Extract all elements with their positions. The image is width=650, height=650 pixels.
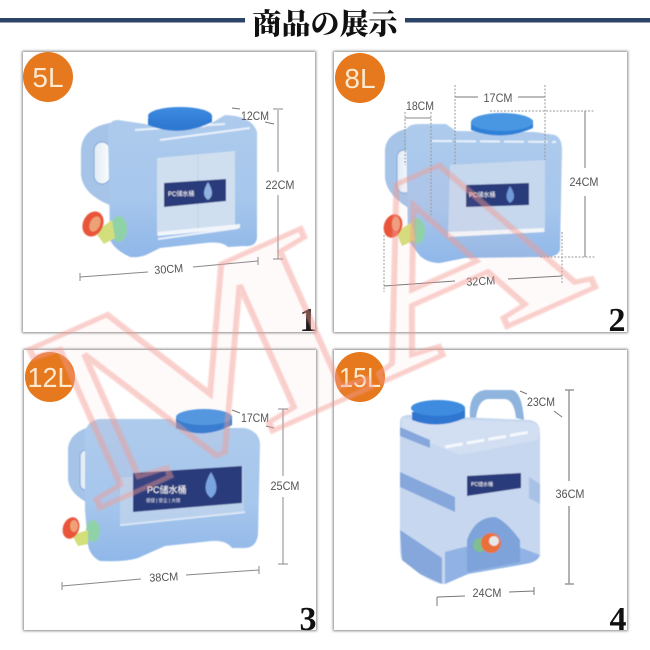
dimension: 12CM xyxy=(232,108,274,124)
dimension: 17CM: 17CM xyxy=(241,413,269,425)
dimension: 24CM: 24CM xyxy=(472,588,502,600)
badge: 15L xyxy=(335,352,385,402)
dimension: 30CM xyxy=(80,257,258,281)
dimension: 25CM xyxy=(270,409,300,564)
badge: 5L xyxy=(23,52,73,102)
jug: 12L: PC储水桶 xyxy=(147,484,187,495)
label xyxy=(466,183,529,207)
jug: 8L xyxy=(380,113,562,263)
number 1: 1 xyxy=(300,302,316,339)
panel: 12L xyxy=(23,349,317,638)
badge: 12L: 12L xyxy=(28,362,72,393)
jug: 5L xyxy=(78,107,257,257)
jug: 15L xyxy=(400,390,540,584)
dimension: 36CM xyxy=(556,390,584,584)
jug: 12L xyxy=(60,409,260,561)
dimension: 36CM: 36CM xyxy=(556,489,584,501)
dimension: 30CM: 30CM xyxy=(154,263,184,277)
number 2: 2 xyxy=(608,302,626,339)
dimension: 24CM xyxy=(490,111,598,257)
jug: 5L: PC储水桶 xyxy=(168,190,194,198)
dimension: 23CM xyxy=(520,391,562,417)
spigot xyxy=(380,212,425,246)
title: 商品の展示 xyxy=(252,8,400,41)
dimension: 23CM: 23CM xyxy=(527,397,555,409)
panel: 8L xyxy=(333,51,628,339)
panel: 5L xyxy=(22,51,316,339)
dimension: 22CM xyxy=(266,109,294,259)
panel: 15L xyxy=(333,349,628,638)
dimension: 18CM: 18CM xyxy=(406,101,434,113)
label xyxy=(133,466,242,512)
badge: 12L xyxy=(25,352,75,402)
dimension: 22CM: 22CM xyxy=(266,180,294,192)
title xyxy=(0,8,650,41)
number 4: 4 xyxy=(610,601,626,638)
badge: 15L: 15L xyxy=(339,362,381,393)
dimension: 17CM xyxy=(455,85,545,165)
watermark: MA: MA xyxy=(0,72,621,563)
badge: 8L: 8L xyxy=(344,63,376,94)
jug: 8L: PC储水桶 xyxy=(469,191,495,199)
spout niche xyxy=(467,517,520,572)
badge: 5L: 5L xyxy=(32,62,64,93)
label xyxy=(467,473,521,496)
dimension: 17CM xyxy=(232,410,274,428)
dimension: 38CM: 38CM xyxy=(149,571,179,585)
number 3: 3 xyxy=(300,601,316,638)
jug: 12L: 便捷 | 安全 | 大容 xyxy=(146,497,181,504)
dimension: 18CM xyxy=(405,101,434,215)
spigot xyxy=(78,208,127,244)
dimension: 25CM: 25CM xyxy=(270,481,300,493)
badge: 8L xyxy=(335,53,385,103)
label xyxy=(164,179,226,207)
dimension: 32CM: 32CM xyxy=(466,275,496,289)
dimension: 32CM xyxy=(384,232,562,292)
dimension: 12CM: 12CM xyxy=(241,111,269,123)
dimension: 38CM xyxy=(62,566,259,590)
jug: 15L: PC储水桶 xyxy=(471,481,493,488)
dimension: 24CM: 24CM xyxy=(570,177,598,189)
spigot xyxy=(60,515,100,546)
dimension: 24CM xyxy=(437,587,534,606)
spigot xyxy=(473,533,501,553)
dimension: 17CM: 17CM xyxy=(484,93,512,105)
